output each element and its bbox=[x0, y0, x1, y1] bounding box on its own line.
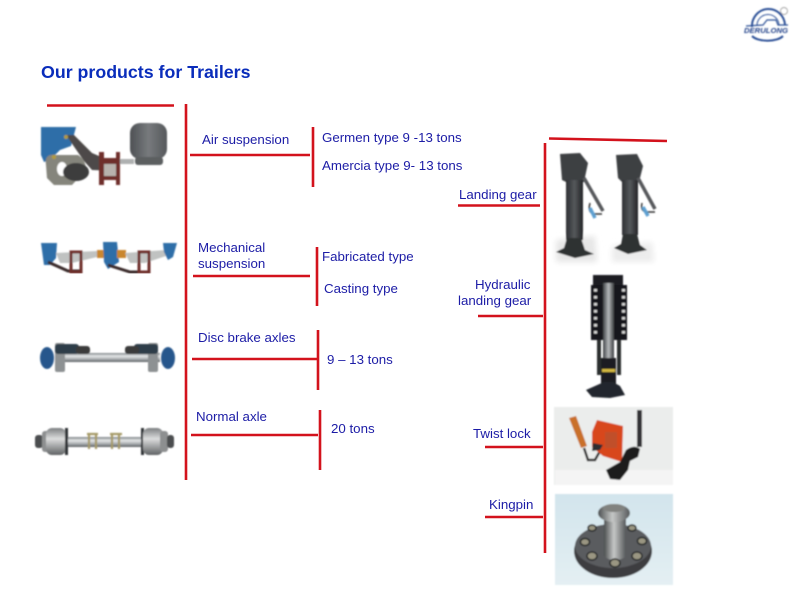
label: 9-13 tons: 9 – 13 tons bbox=[327, 352, 393, 367]
image: normal axle bbox=[35, 428, 174, 455]
label: 20 tons: 20 tons bbox=[331, 421, 375, 436]
right product tree lines bbox=[458, 138, 667, 553]
label: Normal axle: Normal axle bbox=[196, 409, 267, 424]
label: Hydraulic landing gear: landing gear bbox=[458, 293, 532, 308]
label: Amercia type: Amercia type 9- 13 tons bbox=[322, 158, 463, 173]
label: Air suspension: Air suspension bbox=[202, 132, 289, 147]
left product tree lines bbox=[47, 104, 320, 480]
icon: Derulong logo: DERULONG bbox=[744, 26, 788, 35]
image: mechanical suspension bbox=[41, 242, 177, 272]
label: Mechanical suspension: Mechanical bbox=[198, 240, 265, 255]
label: Mechanical suspension bbox=[198, 240, 265, 271]
image: kingpin bbox=[555, 494, 673, 585]
label: Fabricated type: Fabricated type bbox=[322, 249, 414, 264]
label: Hydraulic landing gear: Hydraulic bbox=[475, 277, 531, 292]
label: Landing gear: Landing gear bbox=[459, 187, 537, 202]
label: Kingpin: Kingpin bbox=[489, 497, 533, 512]
image: disc brake axle bbox=[40, 343, 175, 372]
image: hydraulic landing gear bbox=[586, 275, 627, 398]
image: twist lock bbox=[554, 407, 673, 485]
label: Twist lock: Twist lock bbox=[473, 426, 531, 441]
label: Hydraulic landing gear bbox=[458, 277, 532, 308]
label: Disc brake axles: Disc brake axles bbox=[198, 330, 296, 345]
image: air suspension bbox=[41, 123, 167, 185]
label: Casting type: Casting type bbox=[324, 281, 398, 296]
icon: Derulong logo bbox=[744, 8, 788, 41]
title: Our products for Trailers bbox=[41, 62, 251, 82]
label: Mechanical suspension: suspension bbox=[198, 256, 265, 271]
image: landing gear bbox=[556, 153, 655, 262]
label: Germen type: Germen type 9 -13 tons bbox=[322, 130, 462, 145]
